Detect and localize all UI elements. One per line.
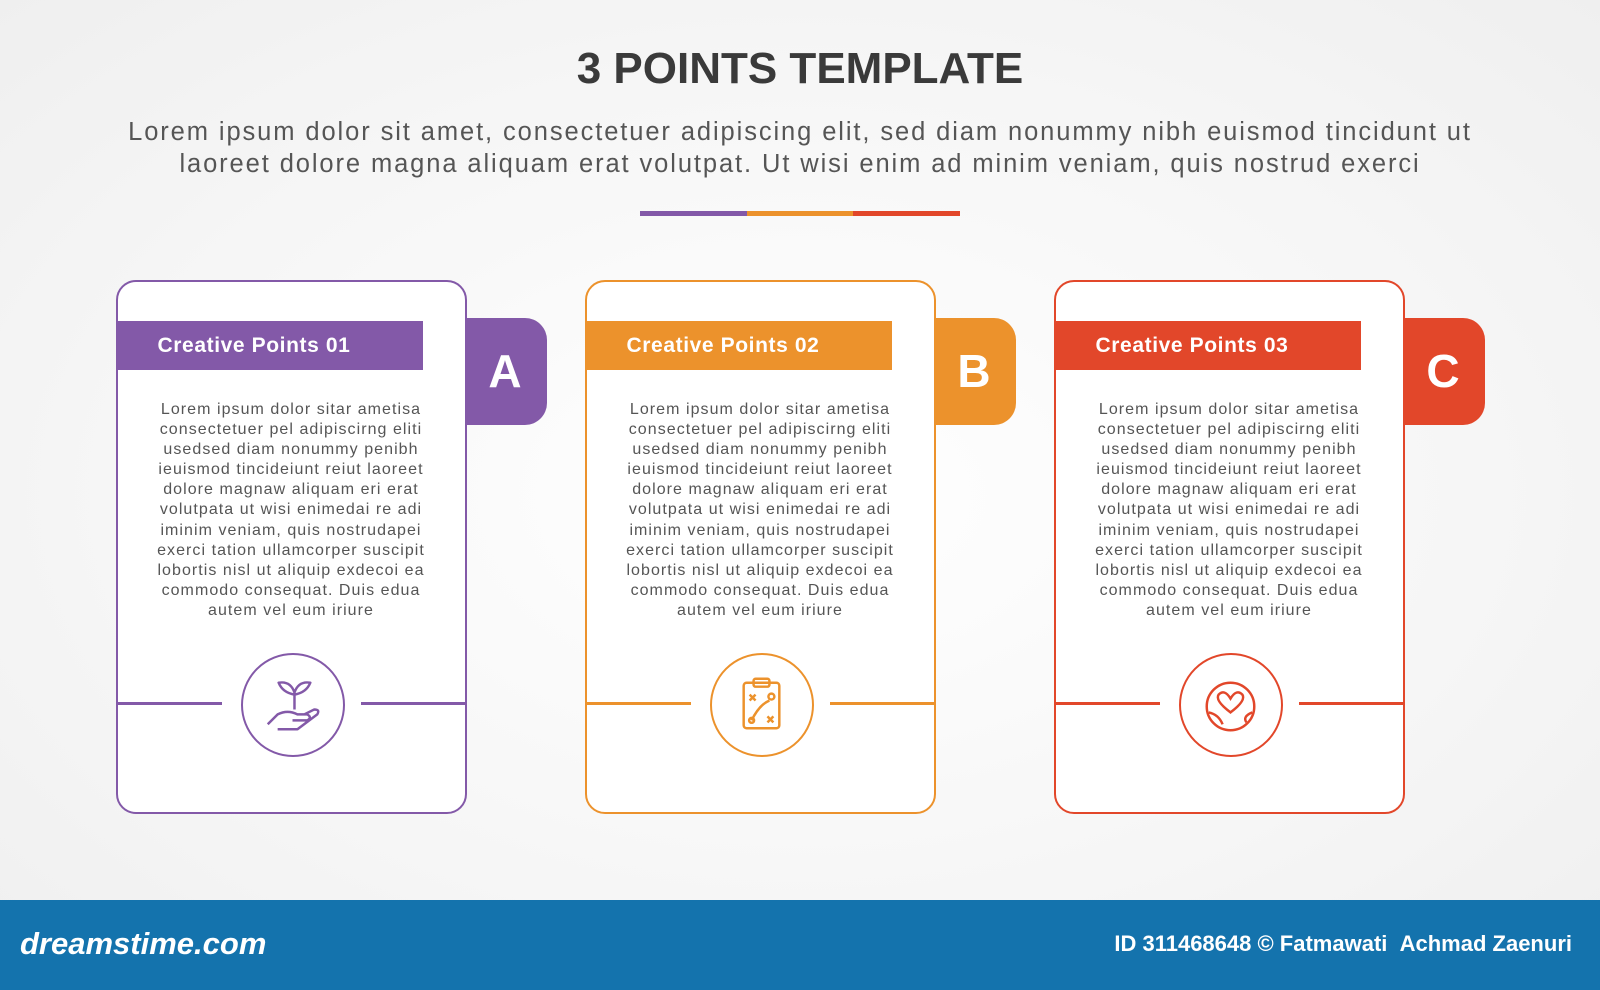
panel: card 2 <box>585 280 936 814</box>
text 1: exerci tation ullamcorper suscipit <box>157 542 425 559</box>
text 2: autem vel eum iriure <box>677 602 843 619</box>
text 1: commodo consequat. Duis edua <box>162 582 420 599</box>
text 2: dolore magnaw aliquam eri erat <box>632 481 888 498</box>
text 1: Lorem ipsum dolor sitar ametisa <box>161 401 421 418</box>
title: 3 POINTS TEMPLATE <box>577 44 1023 93</box>
text 1: usedsed diam nonummy penibh <box>163 441 419 458</box>
text 3: lobortis nisl ut aliquip exdecoi ea <box>1095 562 1363 579</box>
subtitle <box>128 118 1472 178</box>
text 3: exerci tation ullamcorper suscipit <box>1095 542 1363 559</box>
text 3: iminim veniam, quis nostrudapei <box>1098 522 1360 539</box>
text 2: consectetuer pel adipiscirng eliti <box>629 421 891 438</box>
text 3: dolore magnaw aliquam eri erat <box>1101 481 1357 498</box>
text 1: ieuismod tincideiunt reiut laoreet <box>158 461 424 478</box>
footer bar <box>0 900 1600 990</box>
footer credit: ID 311468648 © Fatmawati Achmad Zaenuri <box>1114 931 1572 956</box>
icon: hand with plant <box>241 653 345 757</box>
icon: strategy clipboard <box>710 653 814 757</box>
header 3: Creative Points 03 <box>1096 334 1288 357</box>
text 3: autem vel eum iriure <box>1146 602 1312 619</box>
footer logo: dreamstime.com <box>20 926 266 961</box>
text 3: commodo consequat. Duis edua <box>1100 582 1358 599</box>
header 2 <box>584 321 892 370</box>
text 3: ieuismod tincideiunt reiut laoreet <box>1096 461 1362 478</box>
header 1 <box>116 321 422 370</box>
tab B: B <box>957 345 991 397</box>
tab B <box>936 318 1016 425</box>
text 2: exerci tation ullamcorper suscipit <box>626 542 894 559</box>
header 2: Creative Points 02 <box>626 334 819 357</box>
text 2: Lorem ipsum dolor sitar ametisa <box>630 401 890 418</box>
text 2: lobortis nisl ut aliquip exdecoi ea <box>626 562 894 579</box>
text 1: iminim veniam, quis nostrudapei <box>160 522 422 539</box>
text 2: ieuismod tincideiunt reiut laoreet <box>627 461 893 478</box>
color divider <box>640 211 960 216</box>
tab C <box>1405 318 1485 425</box>
text 2 <box>626 401 894 619</box>
text 1: dolore magnaw aliquam eri erat <box>163 481 419 498</box>
icon: globe heart <box>1179 653 1283 757</box>
text 3: usedsed diam nonummy penibh <box>1101 441 1357 458</box>
text 1: consectetuer pel adipiscirng eliti <box>160 421 422 438</box>
text 1: lobortis nisl ut aliquip exdecoi ea <box>157 562 425 579</box>
tab A <box>467 318 547 425</box>
panel: card 3 <box>1054 280 1405 814</box>
text 3 <box>1095 401 1363 619</box>
panel: card 1 <box>116 280 467 814</box>
header 1: Creative Points 01 <box>158 334 350 357</box>
text 3: consectetuer pel adipiscirng eliti <box>1098 421 1360 438</box>
tab C: C <box>1426 345 1460 397</box>
text 2: iminim veniam, quis nostrudapei <box>629 522 891 539</box>
subtitle: Lorem ipsum dolor sit amet, consectetuer adipiscing elit, sed diam nonummy nibh euismod tincidunt ut <box>128 118 1472 146</box>
text 1 <box>157 401 425 619</box>
text 1: autem vel eum iriure <box>208 602 374 619</box>
text 2: volutpata ut wisi enimedai re adi <box>629 501 891 518</box>
text 3: Lorem ipsum dolor sitar ametisa <box>1099 401 1359 418</box>
text 2: commodo consequat. Duis edua <box>631 582 889 599</box>
subtitle: laoreet dolore magna aliquam erat volutpat. Ut wisi enim ad minim veniam, quis nostrud exerci <box>179 150 1421 178</box>
header 3 <box>1054 321 1360 370</box>
tab A: A <box>488 345 522 397</box>
text 2: usedsed diam nonummy penibh <box>632 441 888 458</box>
text 1: volutpata ut wisi enimedai re adi <box>160 501 422 518</box>
text 3: volutpata ut wisi enimedai re adi <box>1098 501 1360 518</box>
